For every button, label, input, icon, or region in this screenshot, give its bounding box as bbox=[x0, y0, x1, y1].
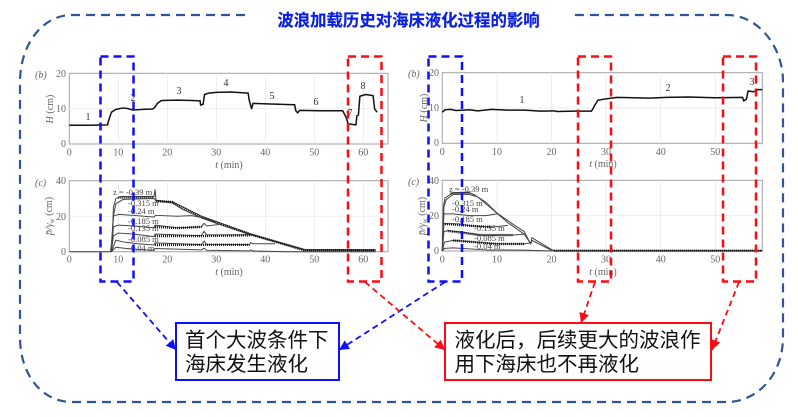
panel: right pore pressure chart: 20 bbox=[546, 254, 556, 266]
panel: left wave height chart: 60 bbox=[358, 148, 368, 158]
panel: left wave height chart: 0 bbox=[67, 148, 72, 158]
depth labels: -0.04 m bbox=[128, 243, 155, 253]
panel: left pore pressure chart: 0 bbox=[67, 254, 72, 266]
panel: left wave height chart: 20 bbox=[56, 69, 66, 80]
depth labels: -0.135 m bbox=[128, 223, 159, 233]
panel: left wave height chart: 10 bbox=[113, 148, 123, 158]
panel: left pore pressure chart: (cm) bbox=[44, 197, 55, 218]
panel: right wave height chart: H (cm) bbox=[419, 94, 430, 123]
highlight: blue dashed box right chart bbox=[428, 56, 462, 282]
depth labels: -0.315 m bbox=[128, 198, 159, 208]
panel: right pore pressure chart: p̄/γ bbox=[417, 222, 428, 236]
panel: right wave height chart: 20 bbox=[429, 68, 439, 79]
callout: red: 液化后，后续更大的波浪作 bbox=[454, 329, 700, 352]
panel: right pore pressure chart: t (min) bbox=[589, 267, 617, 278]
panel: left wave height chart: 10 bbox=[56, 104, 66, 115]
panel: left pore pressure chart: 20 bbox=[162, 254, 172, 266]
panel: right pore pressure chart: 40 bbox=[656, 254, 666, 266]
arrow: blue left box to blue callout bbox=[117, 282, 176, 350]
panel: left wave height chart: 50 bbox=[309, 148, 319, 158]
line: right wave height series bbox=[442, 90, 762, 112]
panel: left pore pressure chart: t (min) bbox=[215, 267, 243, 278]
panel: left pore pressure chart: 60 bbox=[358, 254, 368, 266]
lines: left pore pressure series bbox=[69, 190, 376, 252]
panel: right wave height chart: 50 bbox=[710, 147, 720, 158]
depth labels bbox=[113, 187, 159, 253]
panel: left pore pressure chart: 40 bbox=[56, 176, 66, 187]
panel: right wave height chart: (b) bbox=[408, 69, 420, 80]
panel: right wave height chart: 20 bbox=[546, 147, 556, 158]
depth labels: -0.135 m bbox=[474, 223, 505, 233]
panel: right pore pressure chart bbox=[408, 176, 762, 278]
arrow: blue right box to blue callout bbox=[339, 282, 445, 350]
panel: left pore pressure chart: 50 bbox=[309, 254, 319, 266]
panel: left wave height chart: 8 bbox=[360, 81, 366, 92]
depth labels: -0.185 m bbox=[452, 214, 483, 224]
panel: right wave height chart bbox=[408, 68, 762, 170]
arrow: red left box to red callout bbox=[365, 282, 445, 350]
panel: left wave height chart: 1 bbox=[86, 112, 90, 123]
panel: left wave height chart: 30 bbox=[211, 148, 221, 158]
callout: red bbox=[445, 323, 711, 380]
panel: left wave height chart: t (min) bbox=[215, 160, 243, 171]
panel: left pore pressure chart: p̄/γ bbox=[44, 222, 55, 236]
panel: left pore pressure chart: (c) bbox=[35, 178, 47, 189]
callout: red: 用下海床也不再液化 bbox=[454, 353, 639, 376]
panel: left wave height chart: 2 bbox=[130, 93, 136, 104]
depth labels: z = -0.39 m bbox=[449, 184, 489, 194]
panel: right wave height chart: 1 bbox=[520, 95, 524, 106]
panel: right wave height chart: 0 bbox=[440, 147, 445, 158]
arrow: red end box to red callout bbox=[712, 282, 739, 350]
panel: right pore pressure chart: 40 bbox=[429, 176, 439, 187]
panel: left wave height chart: 3 bbox=[176, 86, 182, 97]
title: 波浪加载历史对海床液化过程的影响 bbox=[277, 11, 540, 30]
depth labels: -0.04 m bbox=[474, 241, 501, 251]
panel: left pore pressure chart: w bbox=[48, 217, 56, 223]
panel: right pore pressure chart: w bbox=[421, 217, 429, 223]
panel: right wave height chart: 2 bbox=[666, 83, 670, 94]
panel: right pore pressure chart: 50 bbox=[710, 254, 720, 266]
panel: left wave height chart: (b) bbox=[35, 70, 47, 81]
panel: right pore pressure chart: (c) bbox=[408, 177, 420, 188]
line: left wave height series bbox=[69, 92, 377, 125]
callout: blue bbox=[176, 323, 339, 380]
depth labels: z = -0.39 m bbox=[113, 187, 153, 197]
depth labels bbox=[449, 184, 505, 251]
panel: right wave height chart: 10 bbox=[429, 103, 439, 114]
highlight: red dashed box right chart middle bbox=[578, 56, 611, 282]
panel: left pore pressure chart: 0 bbox=[61, 247, 66, 258]
depth labels: -0.24 m bbox=[452, 204, 479, 214]
panel: right pore pressure chart: 30 bbox=[601, 254, 611, 266]
panel: right pore pressure chart: 0 bbox=[440, 254, 445, 266]
panel: left pore pressure chart: 10 bbox=[113, 254, 123, 266]
panel: left wave height chart: 6 bbox=[314, 97, 318, 108]
panel: left pore pressure chart: 40 bbox=[260, 254, 270, 266]
panel: right wave height chart: t (min) bbox=[589, 159, 617, 170]
depth labels: -0.185 m bbox=[128, 216, 159, 226]
panel: right wave height chart: 40 bbox=[656, 147, 666, 158]
panel: left wave height chart: 40 bbox=[260, 148, 270, 158]
highlight: blue dashed box left chart bbox=[100, 56, 134, 282]
callout: blue: 海床发生液化 bbox=[185, 353, 308, 376]
panel: right wave height chart: 30 bbox=[601, 147, 611, 158]
depth labels: -0.085 m bbox=[474, 233, 505, 243]
panel: left wave height chart: 0 bbox=[61, 139, 66, 150]
panel: right pore pressure chart: 10 bbox=[492, 254, 502, 266]
panel: left pore pressure chart: 20 bbox=[56, 212, 66, 223]
highlight: red dashed box right chart end bbox=[723, 56, 756, 282]
depth labels: -0.085 m bbox=[128, 234, 159, 244]
depth labels: -0.24 m bbox=[128, 206, 155, 216]
panel: left pore pressure chart bbox=[35, 176, 388, 278]
panel: right pore pressure chart: 0 bbox=[434, 246, 439, 257]
panel: left wave height chart bbox=[35, 69, 388, 171]
panel: right wave height chart: 10 bbox=[492, 147, 502, 158]
panel: left wave height chart: 5 bbox=[270, 91, 274, 102]
lines: right pore pressure series bbox=[442, 193, 762, 251]
panel: right pore pressure chart: 20 bbox=[429, 211, 439, 222]
panel: right wave height chart: 0 bbox=[434, 138, 439, 149]
arrow: red middle box to red callout bbox=[581, 282, 595, 323]
panel: left wave height chart: H (cm) bbox=[45, 95, 56, 124]
panel: left wave height chart: 20 bbox=[162, 148, 172, 158]
callout: blue: 首个大波条件下 bbox=[185, 329, 328, 352]
panel: right pore pressure chart: (cm) bbox=[417, 197, 428, 218]
depth labels: -0.315 m bbox=[452, 198, 483, 208]
highlight: red dashed box left chart bbox=[348, 56, 382, 282]
panel: left wave height chart: 4 bbox=[224, 78, 228, 89]
panel: left pore pressure chart: 30 bbox=[211, 254, 221, 266]
panel: left wave height chart: 7 bbox=[348, 108, 352, 119]
panel: right wave height chart: 3 bbox=[750, 77, 754, 88]
